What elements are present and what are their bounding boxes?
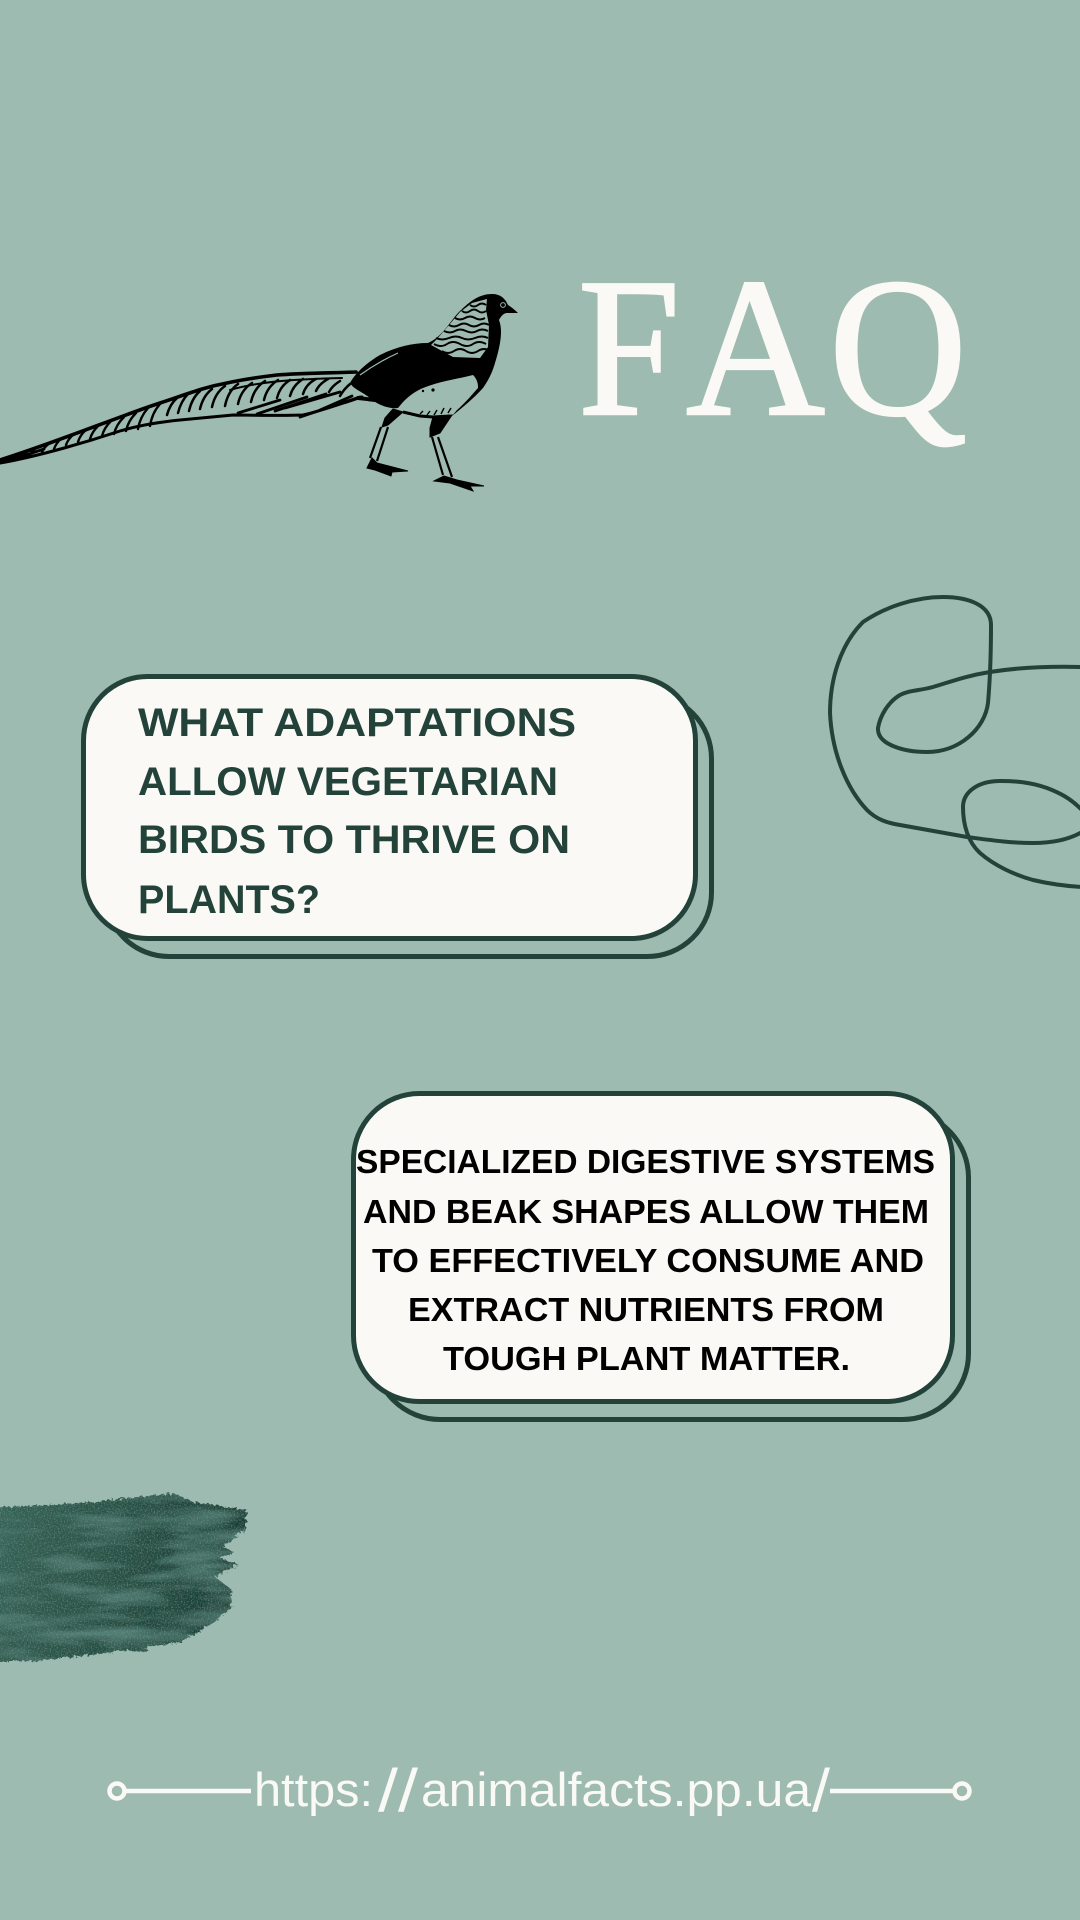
question text bbox=[138, 701, 576, 922]
url text: https: bbox=[254, 1763, 373, 1816]
right connector line and dot bbox=[830, 1784, 970, 1798]
question text: BIRDS TO THRIVE ON bbox=[138, 818, 570, 862]
answer text: EXTRACT NUTRIENTS FROM bbox=[408, 1291, 884, 1328]
bird legs bbox=[367, 409, 484, 491]
answer card shadow outline bbox=[374, 1112, 968, 1420]
title: FAQ: Q bbox=[829, 238, 967, 457]
title: FAQ bbox=[578, 238, 967, 457]
bird tail bbox=[0, 372, 392, 463]
decorative scribble line bbox=[830, 597, 1080, 887]
panel: question card bbox=[84, 676, 712, 956]
question text: PLANTS? bbox=[138, 878, 320, 922]
url text: animalfacts.pp.ua bbox=[421, 1763, 812, 1816]
answer text bbox=[356, 1143, 935, 1377]
title: FAQ: A bbox=[686, 238, 825, 457]
bird neck feathers bbox=[431, 299, 490, 358]
left connector line and dot bbox=[110, 1784, 251, 1798]
question text: ALLOW VEGETARIAN bbox=[138, 760, 558, 804]
question card shadow outline bbox=[105, 694, 712, 956]
bird wing highlight bbox=[360, 353, 398, 375]
answer text: AND BEAK SHAPES ALLOW THEM bbox=[363, 1193, 929, 1230]
question card face bbox=[84, 676, 696, 938]
icon: pheasant bird illustration bbox=[0, 294, 518, 491]
bird eye bbox=[501, 303, 505, 307]
url text: // bbox=[378, 1757, 418, 1824]
neck light patch bbox=[431, 299, 489, 358]
footer: website url with connector lines bbox=[110, 1757, 970, 1824]
question text: WHAT ADAPTATIONS bbox=[138, 701, 576, 745]
answer card face bbox=[354, 1094, 952, 1402]
decorative brush stroke bbox=[0, 1493, 247, 1661]
bird body and head bbox=[350, 294, 518, 416]
bird belly bbox=[403, 388, 451, 417]
url text bbox=[254, 1757, 830, 1824]
title: FAQ: F bbox=[578, 238, 680, 457]
neck scallop rows bbox=[434, 304, 490, 353]
answer text: TOUGH PLANT MATTER. bbox=[443, 1340, 850, 1377]
answer text: SPECIALIZED DIGESTIVE SYSTEMS bbox=[356, 1143, 935, 1180]
url text: / bbox=[812, 1757, 830, 1824]
panel: answer card bbox=[354, 1094, 968, 1420]
answer text: TO EFFECTIVELY CONSUME AND bbox=[372, 1242, 924, 1279]
